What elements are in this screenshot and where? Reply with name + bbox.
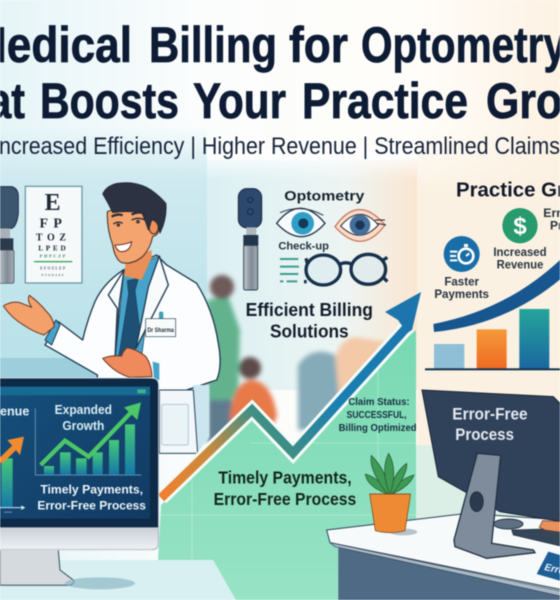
name badge <box>146 312 176 337</box>
necktie <box>119 278 141 360</box>
desk <box>327 513 560 600</box>
eye chart: LPED <box>38 243 68 252</box>
coat lower section and pocket <box>159 385 209 453</box>
left monitor <box>0 378 159 589</box>
monitor back <box>422 390 560 522</box>
main zigzag growth arrow <box>161 292 421 498</box>
title: for <box>289 17 348 73</box>
mouse <box>494 519 523 529</box>
claim status callout: SUCCESSFUL, <box>347 410 407 421</box>
potted plant <box>365 453 417 535</box>
efficient billing label: Solutions <box>270 321 349 342</box>
timely payments caption: Timely Payments, <box>218 467 352 487</box>
screen caption: Timely Payments, <box>40 482 143 496</box>
eye chart: E <box>45 190 61 216</box>
efficient billing label: Efficient Billing <box>246 299 373 320</box>
label: increased revenue: Increased <box>493 245 547 259</box>
optometry check-up panel: Check-up <box>278 240 329 252</box>
otoscope centre <box>238 189 262 290</box>
green growth panel <box>158 330 416 600</box>
timely payments caption: Error-Free Process <box>214 489 356 509</box>
title: Your <box>193 73 286 129</box>
icon: revenue dollar <box>502 208 538 243</box>
icon: stopwatch <box>444 236 480 272</box>
optometry check-up panel: Optometry <box>284 188 365 204</box>
monitor stand <box>454 453 535 558</box>
label: faster payments <box>434 274 489 301</box>
neck <box>124 250 152 280</box>
icon: right eye <box>335 210 386 241</box>
title <box>0 17 560 129</box>
eye chart: FP <box>39 216 67 231</box>
raised hand <box>3 295 54 335</box>
eyes, brows and smile <box>112 212 146 226</box>
claim status callout: Billing Optimized <box>339 423 417 434</box>
label: increased revenue <box>493 245 547 272</box>
screen caption: Error-Free Process <box>37 498 146 512</box>
timely payments caption <box>214 467 356 509</box>
growth curve <box>433 260 560 332</box>
cuff <box>45 320 60 345</box>
screen chart: expanded growth: Expanded <box>55 403 112 417</box>
icon: checklist lines <box>280 259 299 281</box>
claim status callout <box>339 397 417 434</box>
optometry check-up panel <box>277 188 387 285</box>
claim status callout: Claim Status: <box>348 397 410 408</box>
blurred clinic patients in the background <box>207 275 416 450</box>
error-free computer: Error-Free <box>452 404 528 423</box>
desk floor surface, lower left <box>0 560 236 600</box>
label: error-free process <box>543 206 560 232</box>
eye chart <box>25 186 82 283</box>
error-free computer: Process <box>455 425 514 444</box>
label: increased revenue: Revenue <box>497 258 544 272</box>
lab coat <box>45 255 220 410</box>
coat lapels <box>108 256 168 358</box>
screen chart: expanded growth: Growth <box>62 419 104 433</box>
desk sign <box>537 552 560 582</box>
doctor <box>3 183 220 410</box>
title: Boosts <box>40 73 179 129</box>
eye chart: PTODAEF <box>42 273 65 277</box>
name badge: Dr Sharma <box>147 328 175 334</box>
error-free computer <box>422 390 560 582</box>
face <box>107 206 159 263</box>
icon: revenue dollar: $ <box>513 213 527 240</box>
label: faster payments: Payments <box>434 287 489 301</box>
screen chart: expanded growth <box>35 402 142 475</box>
efficient billing label <box>246 299 373 342</box>
screen chart: revenue <box>0 404 29 513</box>
practice growth panel <box>425 180 560 370</box>
screen caption <box>37 482 146 512</box>
keyboard and hand <box>512 521 560 547</box>
screen chart: revenue: enue <box>0 404 29 418</box>
title: Billing <box>149 17 277 73</box>
label: faster payments: Faster <box>444 274 479 288</box>
icon: left eye <box>277 208 325 237</box>
eye chart: PHPCZP <box>40 253 67 258</box>
shirt and collar <box>115 256 159 360</box>
ear <box>149 219 158 234</box>
bars <box>425 309 560 370</box>
hair <box>103 183 166 233</box>
title: Practice <box>302 73 468 129</box>
icon: otoscope left <box>0 187 18 283</box>
icon: glasses <box>304 254 387 285</box>
eye chart: EFOZLEP <box>40 266 67 270</box>
lower hand <box>103 348 152 377</box>
eye chart: TOZ <box>36 233 71 244</box>
